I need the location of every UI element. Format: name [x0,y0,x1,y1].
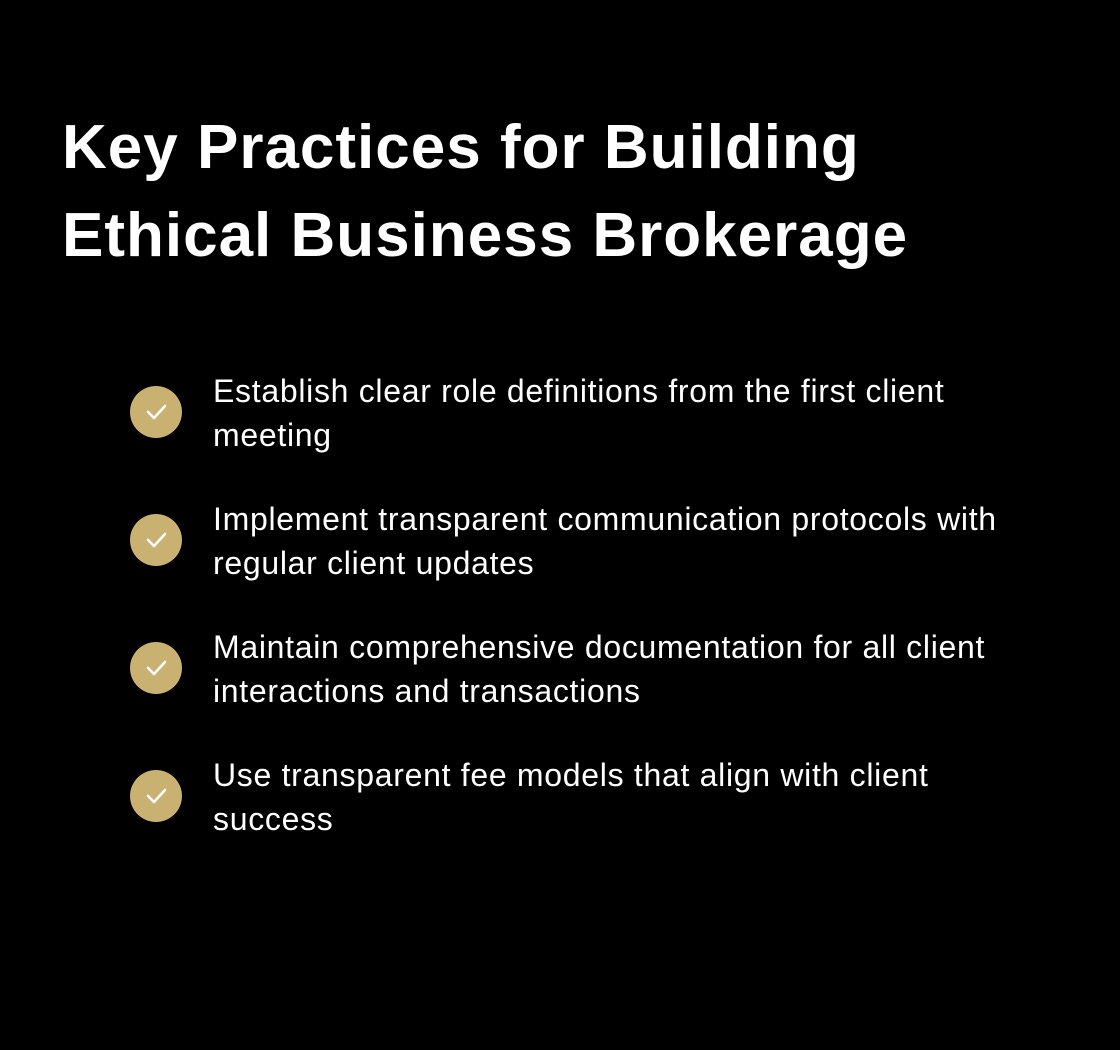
item 4 [130,757,929,837]
text 4: Use transparent fee models that align with client success [213,757,929,837]
item 2 [130,501,997,581]
icon: check [130,514,182,566]
title: Key Practices for Building [62,113,860,182]
icon: check [130,642,182,694]
icon: check [130,386,182,438]
text 1: Establish clear role definitions from the first client meeting [213,373,944,453]
text 2: Implement transparent communication protocols with regular client updates [213,501,997,581]
item 3 [130,629,985,709]
text 3: Maintain comprehensive documentation for all client interactions and transactions [213,629,985,709]
title: Ethical Business Brokerage [62,201,908,270]
icon: check [130,770,182,822]
title [62,113,908,270]
item 1 [130,373,944,453]
